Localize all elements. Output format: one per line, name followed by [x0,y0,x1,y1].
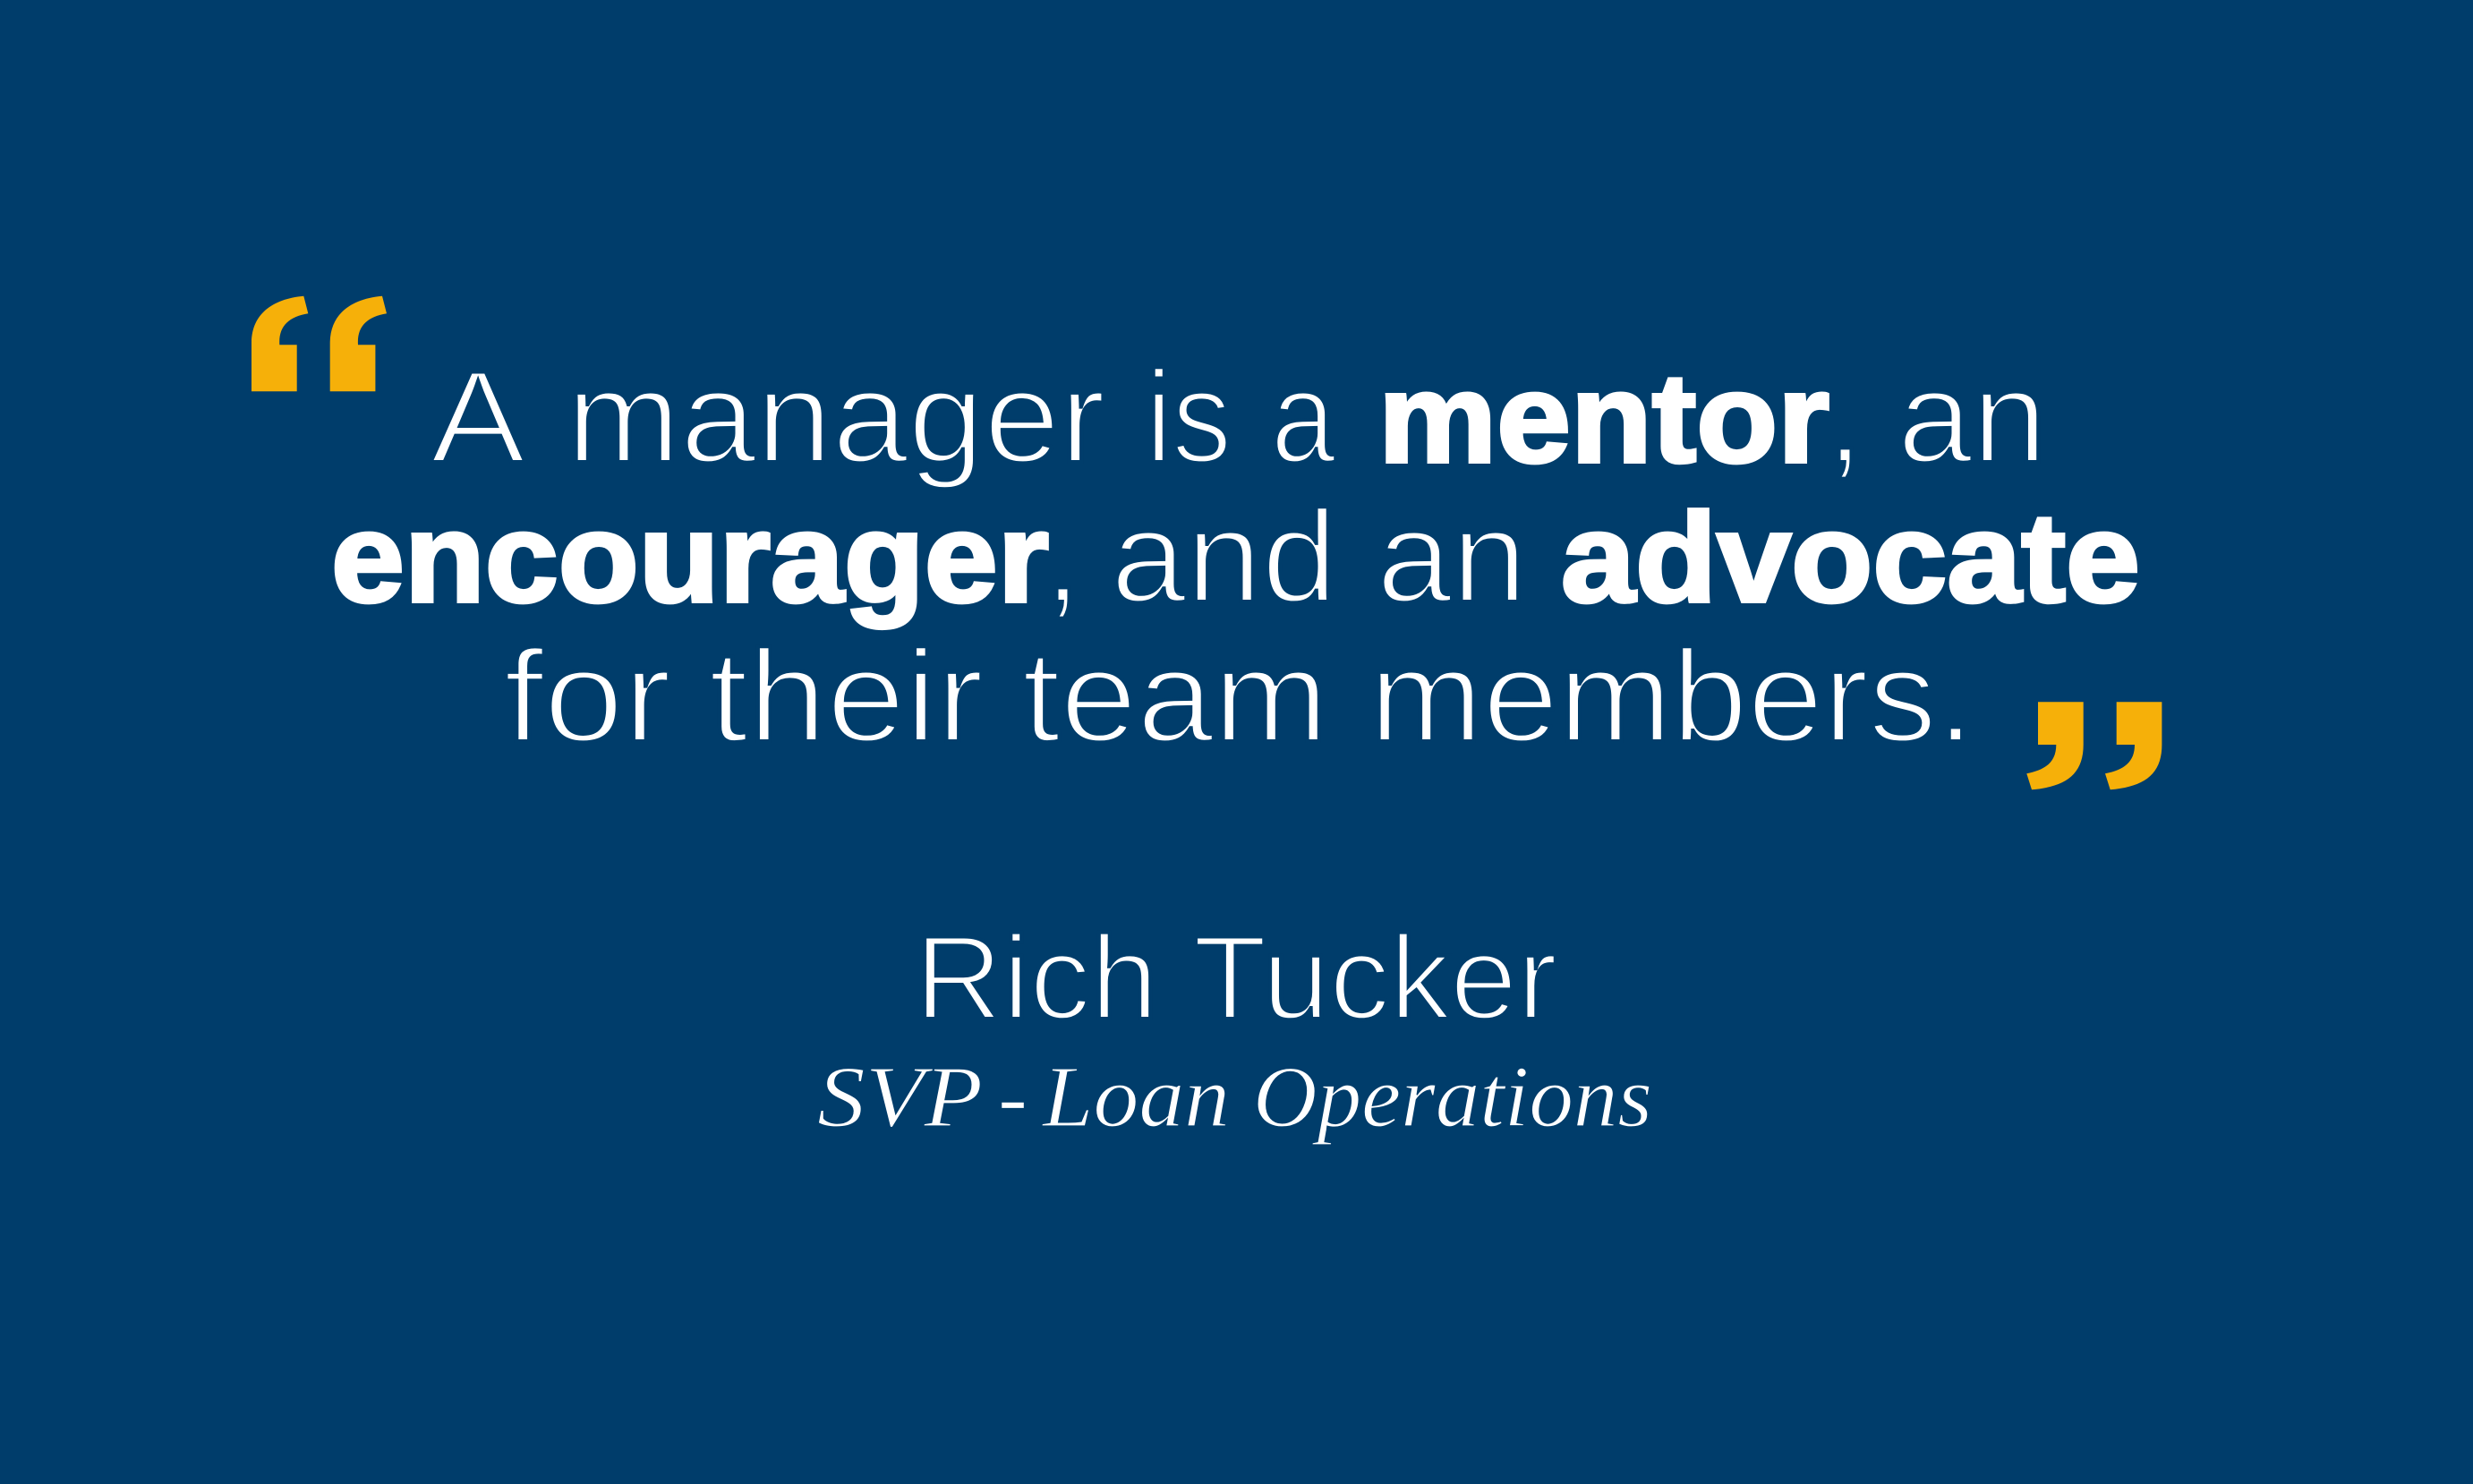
quote line 3: members. [1369,623,1974,769]
quote line 2: encourager [331,487,1049,629]
attribution job title [817,1049,1652,1146]
quote line 1: an [1897,344,2047,490]
quote line 3: team [1022,623,1328,769]
quote line 1: , [1827,344,1863,490]
quote line 1: is [1146,344,1232,490]
attribution job title: Operations [1253,1049,1652,1146]
attribution name: Tucker [1193,912,1557,1045]
attribution job title: Loan [1041,1049,1230,1146]
attribution name [915,912,1557,1045]
quote line 1: a [1271,344,1336,490]
quote line 2: advocate [1561,487,2140,629]
quote line 3 [504,623,1974,769]
quote line 3: their [709,623,984,769]
icon: opening quotation mark [252,296,387,391]
quote line 2: , [1045,483,1081,629]
quote text [331,344,2140,769]
quote line 1 [431,344,2047,490]
quote line 2: and [1111,483,1337,629]
quote line 1: A [431,344,526,490]
quote line 1: mentor [1378,347,1829,490]
icon: closing quotation mark [2026,702,2162,789]
quote line 2 [331,483,2140,629]
quote line 1: manager [567,344,1105,490]
attribution job title: SVP [817,1049,983,1146]
quote line 2: an [1377,483,1527,629]
attribution name: Rich [915,912,1158,1045]
quote line 3: for [504,623,671,769]
attribution job title: - [998,1049,1028,1146]
